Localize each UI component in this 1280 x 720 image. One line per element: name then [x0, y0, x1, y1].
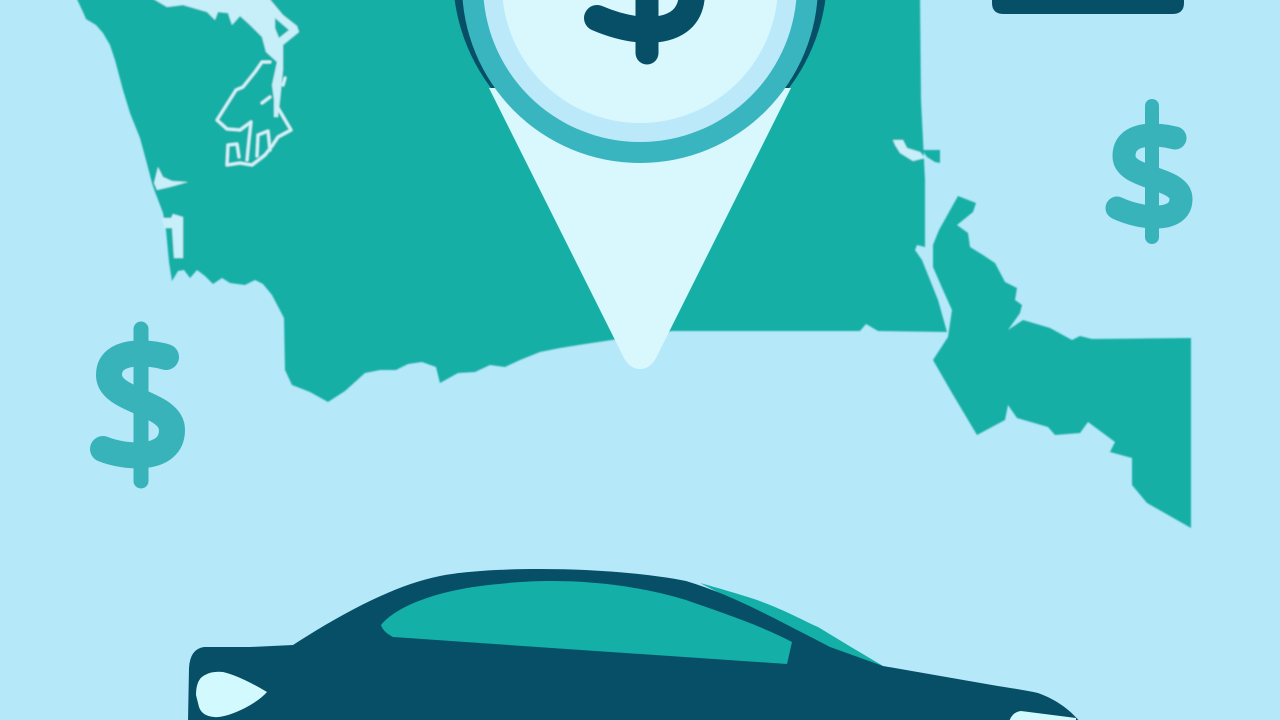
car rear windshield strip: [700, 583, 883, 666]
icon: pin dollar sign: [597, 0, 692, 53]
map: Willapa Bay inlet: [162, 214, 183, 258]
pin inner face: [502, 0, 778, 123]
map: eastern inlet: [893, 140, 925, 161]
map: upper Puget Sound water: [150, 0, 299, 117]
map: south Puget Sound channels: [217, 62, 291, 165]
pin point: [489, 88, 791, 369]
map: Puget Sound island: [275, 18, 289, 38]
map: small eastern lake spur: [922, 150, 940, 163]
icon: car: [188, 569, 1080, 720]
icon: dollar sign right: [1117, 106, 1181, 237]
pin teal ring: [462, 0, 818, 163]
map: Idaho/eastern part: [933, 196, 1191, 528]
car body: [188, 569, 1080, 720]
pin light ring: [483, 0, 797, 142]
icon: dollar sign left: [103, 329, 172, 481]
car headlight: [1009, 711, 1076, 720]
car tail light: [196, 672, 267, 717]
map: Grays Harbor inlet: [154, 167, 188, 190]
pin outer dark rim: [453, 0, 827, 162]
icon: location pin: [453, 0, 827, 369]
map: Washington state, western part: [76, 0, 947, 402]
car window: [381, 581, 792, 664]
icon: dark card corner: [992, 0, 1184, 14]
